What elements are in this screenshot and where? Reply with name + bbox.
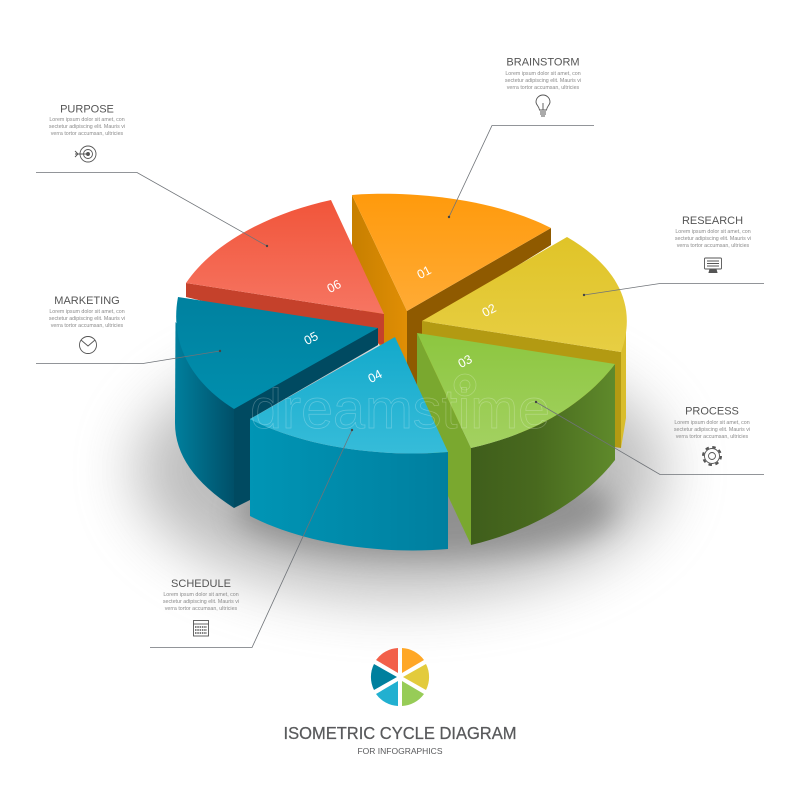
subtitle: FOR INFOGRAPHICS: [357, 746, 443, 756]
slice 04: [250, 337, 448, 550]
description: sectetur adipiscing elit. Mauris vi: [163, 599, 239, 605]
callout: process: PROCESS: [685, 406, 739, 418]
icon: monitor: [704, 258, 722, 272]
icon: gear: [703, 447, 721, 465]
description: Lorem ipsum dolor sit amet, con: [49, 309, 125, 315]
description: verra tortor accumsan, ultricies: [51, 323, 124, 329]
number 01: 01: [415, 263, 434, 282]
watermark: dreamstime: [250, 377, 550, 440]
description: verra tortor accumsan, ultricies: [677, 243, 750, 249]
number 04: 04: [366, 367, 385, 386]
slice 02: [422, 237, 627, 448]
callout: process: [535, 401, 764, 474]
callout: research: RESEARCH: [682, 215, 743, 227]
callout: marketing: MARKETING: [54, 295, 120, 307]
slice 03: [417, 333, 615, 545]
icon: pie clock: [80, 336, 96, 354]
leader line: [150, 430, 352, 648]
slice 01: [352, 194, 551, 400]
description: Lorem ipsum dolor sit amet, con: [674, 420, 750, 426]
description: sectetur adipiscing elit. Mauris vi: [505, 78, 581, 84]
description: verra tortor accumsan, ultricies: [51, 131, 124, 137]
icon: target: [75, 146, 96, 162]
leader line: [449, 126, 594, 217]
description: sectetur adipiscing elit. Mauris vi: [49, 124, 125, 130]
callout: marketing: [36, 295, 221, 364]
icon: light bulb: [536, 95, 550, 116]
callout: purpose: PURPOSE: [60, 104, 114, 116]
description: Lorem ipsum dolor sit amet, con: [49, 117, 125, 123]
callout: purpose: [36, 104, 268, 247]
leader line: [536, 402, 764, 474]
callout: brainstorm: [448, 56, 594, 218]
description: verra tortor accumsan, ultricies: [676, 434, 749, 440]
number 03: 03: [456, 352, 475, 371]
leader line: [36, 172, 267, 246]
callout: schedule: [150, 429, 353, 648]
description: sectetur adipiscing elit. Mauris vi: [49, 316, 125, 322]
icon: calendar: [194, 620, 208, 636]
description: verra tortor accumsan, ultricies: [165, 606, 238, 612]
pie chart: [175, 194, 627, 550]
slice 05: [175, 297, 378, 508]
description: sectetur adipiscing elit. Mauris vi: [674, 427, 750, 433]
callout: research: [583, 215, 764, 296]
leader line: [584, 284, 764, 295]
title: ISOMETRIC CYCLE DIAGRAM: [284, 723, 516, 743]
number 05: 05: [302, 329, 321, 348]
small pie logo: [371, 648, 429, 706]
description: Lorem ipsum dolor sit amet, con: [163, 592, 239, 598]
leader line: [36, 351, 220, 364]
drop shadow: [135, 342, 665, 598]
description: sectetur adipiscing elit. Mauris vi: [675, 236, 751, 242]
description: Lorem ipsum dolor sit amet, con: [505, 71, 581, 77]
number 02: 02: [480, 301, 499, 320]
callout: brainstorm: BRAINSTORM: [506, 56, 580, 68]
description: verra tortor accumsan, ultricies: [507, 85, 580, 91]
slice 06: [186, 200, 384, 345]
callout: schedule: SCHEDULE: [171, 578, 231, 590]
description: Lorem ipsum dolor sit amet, con: [675, 229, 751, 235]
number 06: 06: [325, 277, 344, 296]
